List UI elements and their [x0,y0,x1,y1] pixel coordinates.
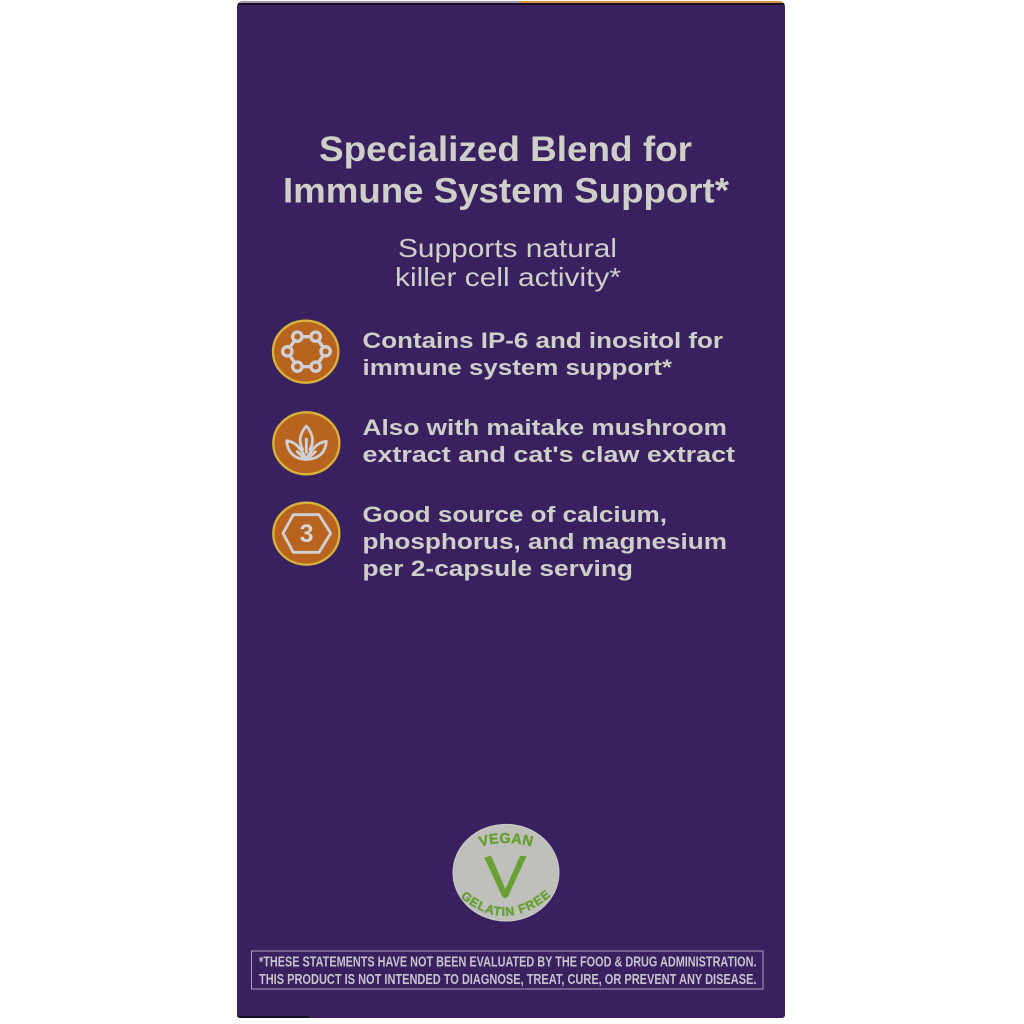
bullet text 1 [362,328,723,380]
bullet text 1: Contains IP-6 and inositol for [362,328,723,353]
badge: vegan gelatin free: GELATIN FREE [462,890,551,916]
icon: hexagon three: 3 [300,521,314,548]
panel: purple box [237,1,785,1018]
bullet text 3: Good source of calcium, [362,502,667,527]
subheading: killer cell activity* [395,262,621,292]
subheading: Supports natural [398,233,617,263]
badge: vegan gelatin free: VEGAN [478,832,534,846]
badge: vegan gelatin free [452,824,560,922]
icon: plant leaves [273,412,339,474]
bullet text 2: extract and cat's claw extract [362,442,736,467]
heading [283,130,729,210]
bullet text 3: per 2-capsule serving [362,556,633,581]
disclaimer box [252,951,763,989]
bullet text 3: phosphorus, and magnesium [362,529,727,554]
subheading [395,233,621,292]
bullet text 3 [362,502,727,581]
icon: molecule ring [273,321,338,383]
disclaimer text [259,954,756,988]
bullet text 1: immune system support* [362,355,672,380]
bullet text 2: Also with maitake mushroom [362,415,727,440]
icon: hexagon three [273,503,339,565]
heading: Immune System Support* [283,172,729,210]
bullet text 2 [362,415,736,467]
disclaimer text: *THESE STATEMENTS HAVE NOT BEEN EVALUATED BY THE FOOD & DRUG ADMINISTRATION. [259,954,756,970]
heading: Specialized Blend for [319,130,692,169]
disclaimer text: THIS PRODUCT IS NOT INTENDED TO DIAGNOSE, TREAT, CURE, OR PREVENT ANY DISEASE. [259,972,756,988]
